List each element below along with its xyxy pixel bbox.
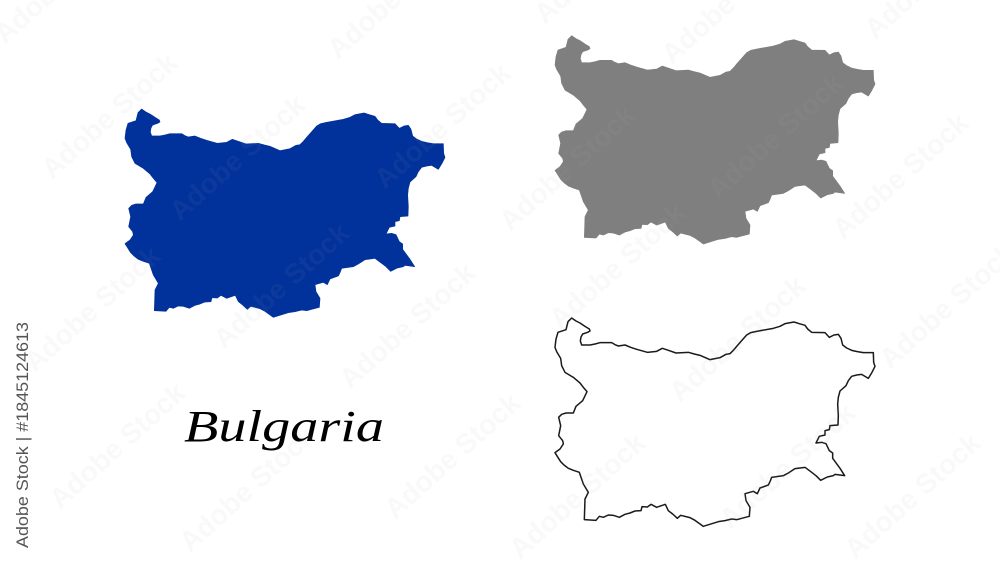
watermarks: Adobe Stock <box>503 427 652 563</box>
watermarks: Adobe Stock <box>207 217 356 354</box>
map: blue filled Bulgaria <box>125 109 445 317</box>
watermarks: Adobe Stock <box>543 197 692 334</box>
watermarks: Adobe Stock <box>35 47 184 184</box>
map: gray filled Bulgaria <box>555 36 875 244</box>
watermarks: Adobe Stock <box>713 397 862 534</box>
watermarks: Adobe Stock <box>826 107 975 244</box>
watermarks: Adobe Stock <box>493 99 642 236</box>
watermarks: Adobe Stock <box>173 420 322 557</box>
watermarks: Adobe Stock <box>368 57 517 194</box>
map: black outline Bulgaria <box>555 318 875 526</box>
watermarks: Adobe Stock <box>18 240 167 377</box>
stock id label: Adobe Stock | #1845124613 <box>13 322 32 548</box>
watermarks: Adobe Stock <box>701 67 850 204</box>
watermarks: Adobe Stock <box>43 377 192 514</box>
watermarks: Adobe Stock <box>333 257 482 394</box>
watermarks: Adobe Stock <box>663 270 812 407</box>
watermarks: Adobe Stock <box>838 427 987 563</box>
watermarks: Adobe Stock <box>163 89 312 226</box>
watermarks: Adobe Stock <box>378 387 527 524</box>
title: Bulgaria: Bulgaria <box>184 402 384 451</box>
